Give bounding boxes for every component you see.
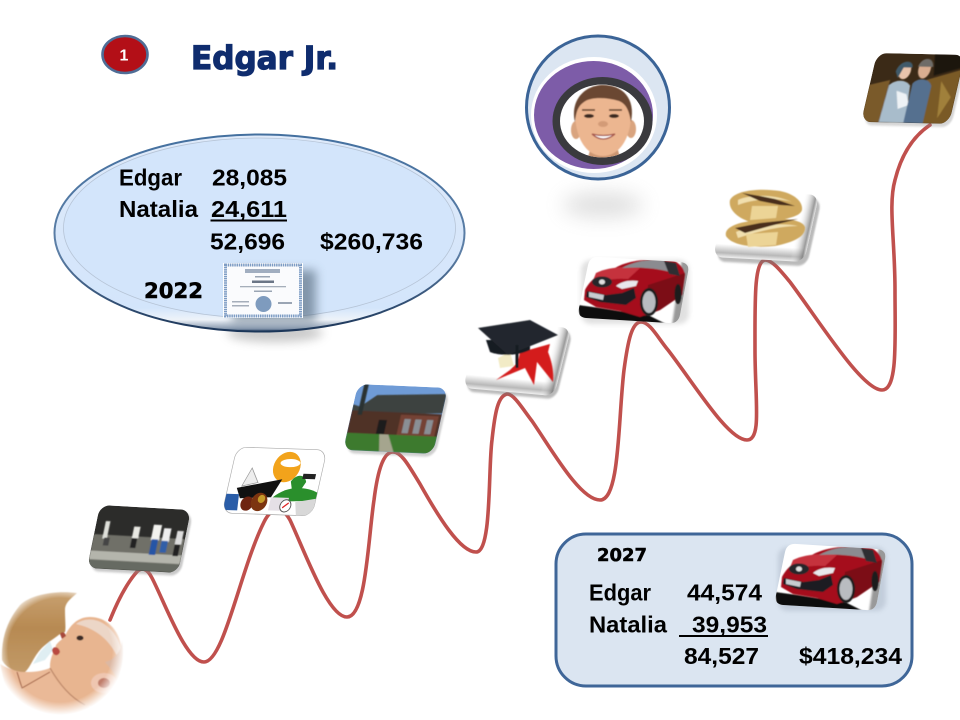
2027 amounts text: 84,527 <box>684 643 759 669</box>
2022 amounts text <box>119 164 423 254</box>
2027 amounts text: $418,234 <box>799 643 902 669</box>
icon: graduation cap and diploma <box>462 320 574 399</box>
2022 amounts text: 28,085 <box>212 164 287 190</box>
panel: portrait circle <box>526 36 670 217</box>
icon: travel collage <box>222 447 327 516</box>
photo: red car <box>578 258 690 326</box>
2022 amounts text: Edgar <box>119 164 182 190</box>
2027 amounts text: 39,953 <box>692 612 767 638</box>
photo: red car small <box>776 544 887 612</box>
2027 amounts text: 44,574 <box>687 580 762 606</box>
panel: 2027 summary <box>556 534 912 686</box>
2027 amounts text: Edgar <box>589 580 651 606</box>
life path curve <box>110 125 930 662</box>
2022 amounts text: 52,696 <box>210 228 285 254</box>
2027 year label: 2027 <box>597 545 647 566</box>
photo: wedding rings <box>712 190 823 266</box>
2022 year label: 2022 <box>144 279 203 303</box>
2022 amounts text: Natalia <box>119 196 198 222</box>
photo: children playing <box>86 505 194 576</box>
number badge <box>102 36 148 73</box>
photo: school building <box>342 384 451 457</box>
number badge: 1 <box>120 48 129 64</box>
photo: smiling boy <box>552 77 652 165</box>
2022 amounts text: $260,736 <box>320 228 423 254</box>
title: Edgar Jr. <box>191 39 338 77</box>
photo: older couple <box>860 53 960 127</box>
photo: mother and baby <box>0 592 123 716</box>
panel: 2022 oval <box>54 134 464 342</box>
2022 amounts text: 24,611 <box>211 196 287 222</box>
2027 amounts text <box>589 580 902 669</box>
2027 amounts text: Natalia <box>589 612 667 638</box>
icon: diploma <box>223 263 316 322</box>
